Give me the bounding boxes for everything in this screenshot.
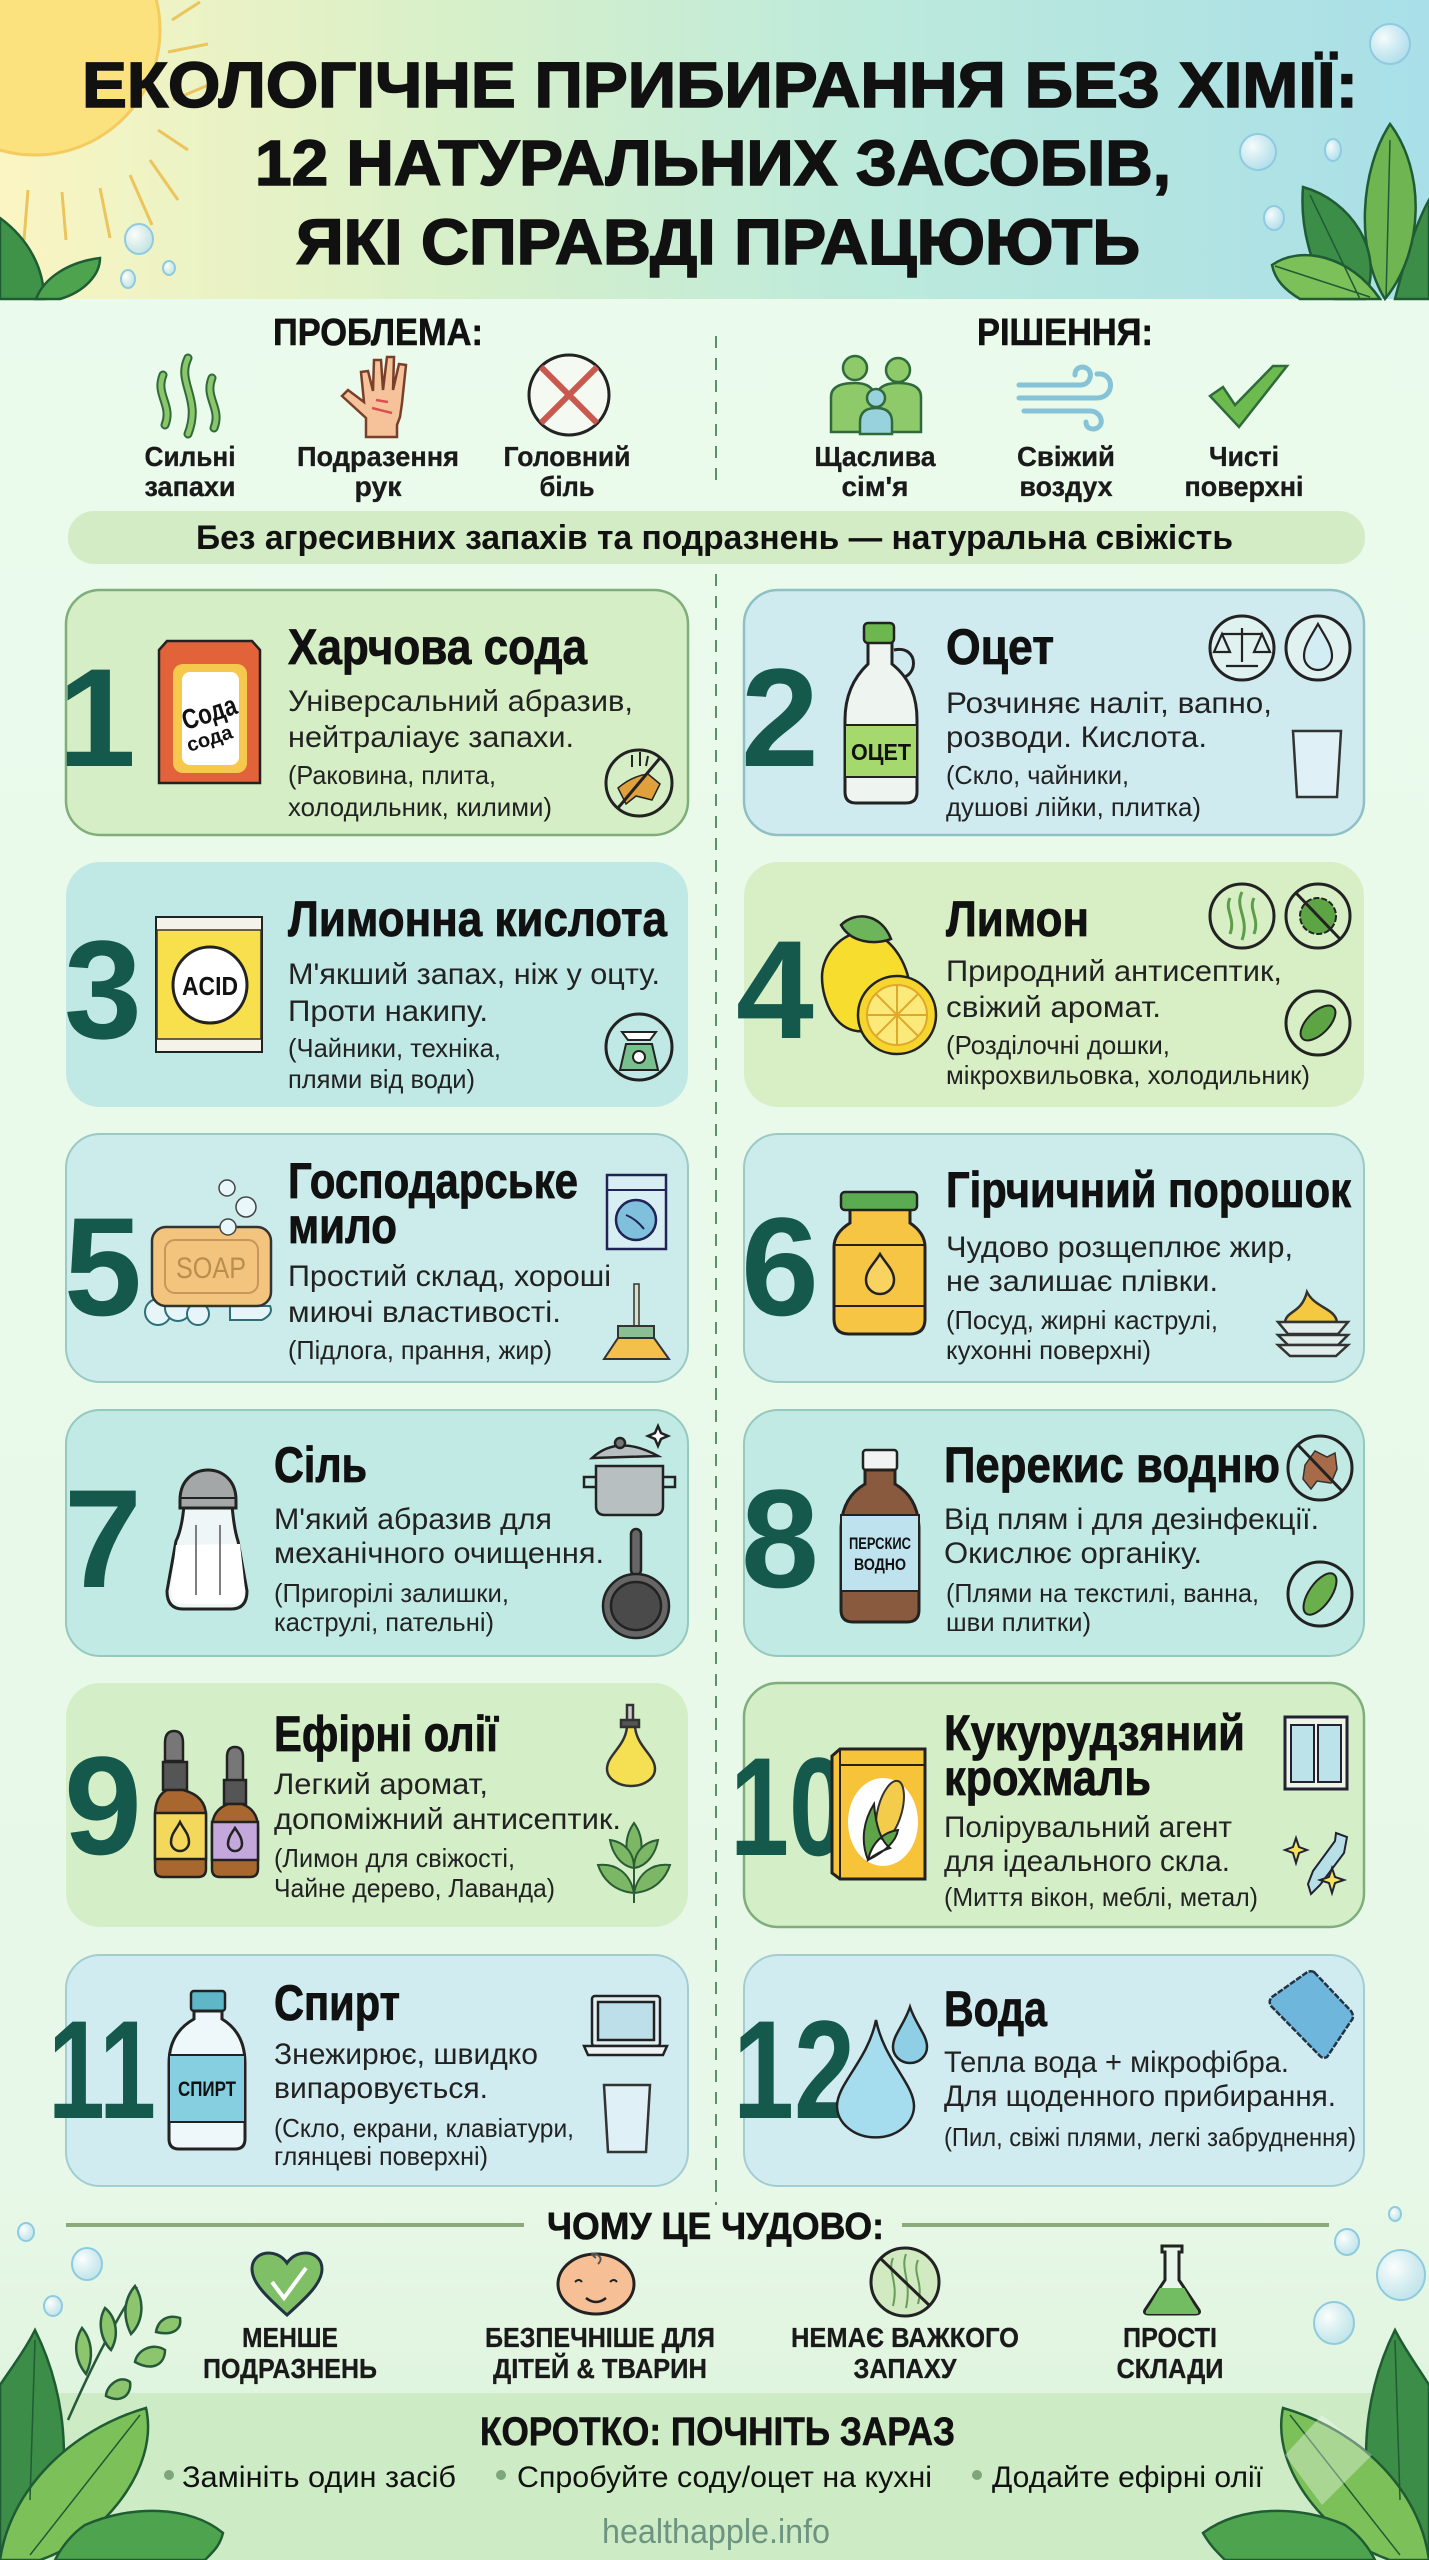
bullet list	[164, 2461, 1264, 2494]
card text: розводи. Кислота.	[946, 721, 1207, 754]
bullet list: Замініть один засіб	[182, 2461, 456, 2494]
header banner	[0, 0, 1429, 299]
card text: (Лимон для свіжості,	[274, 1843, 515, 1873]
card text: Природний антисептик,	[946, 955, 1282, 988]
icon: laptop	[584, 1996, 667, 2055]
card text: Гірчичний порошок	[946, 1162, 1352, 1218]
number 5: 5	[64, 1188, 142, 1345]
website: healthapple.info	[602, 2513, 830, 2551]
icon: window	[1285, 1717, 1347, 1789]
card text: Господарське	[288, 1153, 578, 1209]
icon: leaves bottom right	[1203, 2330, 1429, 2560]
labels: benefits: НЕМАЄ ВАЖКОГО	[791, 2322, 1019, 2353]
title: 12 НАТУРАЛЬНИХ ЗАСОБІВ,	[255, 127, 1171, 199]
icon: greasy plates	[1278, 1292, 1348, 1356]
icon: vinegar bottle: ОЦЕТ	[851, 739, 911, 765]
card text: (Миття вікон, меблі, метал)	[944, 1882, 1258, 1912]
number 8: 8	[741, 1460, 819, 1617]
card text: (Раковина, плита,	[288, 760, 496, 790]
labels: solutions: Щаслива	[814, 441, 936, 472]
heading rule right	[902, 2223, 1329, 2227]
card text: Чудово розщеплює жир,	[946, 1231, 1293, 1264]
panel: card 8	[741, 1410, 1364, 1656]
icon: heart check	[252, 2253, 322, 2315]
card text: Універсальний абразив,	[288, 685, 633, 718]
labels: benefits: ПРОСТІ	[1123, 2322, 1217, 2353]
card text: Проти накипу.	[288, 995, 488, 1028]
number 7: 7	[64, 1460, 142, 1617]
labels: benefits: ПОДРАЗНЕНЬ	[203, 2353, 377, 2384]
bubbles top	[121, 24, 1410, 288]
card text: допоміжний антисептик.	[274, 1803, 621, 1836]
number 2: 2	[741, 639, 819, 796]
card text	[288, 1153, 611, 1365]
card text: глянцеві поверхні)	[274, 2141, 488, 2171]
card text: крохмаль	[944, 1750, 1151, 1806]
icon: fresh smell	[1210, 884, 1274, 948]
panel: problem	[144, 312, 630, 502]
number 9: 9	[64, 1727, 142, 1884]
icon: drinking glass	[604, 2085, 650, 2152]
card text: Чайне дерево, Лаванда)	[274, 1873, 555, 1903]
icon: fresh air	[1019, 367, 1110, 429]
card text: Спирт	[274, 1975, 400, 2031]
section: why it's great	[66, 2206, 1329, 2384]
panel: card 4	[736, 862, 1364, 1107]
card text	[274, 1437, 604, 1637]
card text: Від плям і для дезінфекції.	[944, 1503, 1319, 1536]
card text: Знежирює, швидко	[274, 2038, 538, 2071]
card text: Для щоденного прибирання.	[944, 2080, 1336, 2113]
icon: drop	[1286, 616, 1350, 680]
icon: pot	[584, 1426, 675, 1515]
icon: strong smells	[161, 358, 216, 434]
icon: soda box: сода	[184, 721, 236, 757]
card text: Харчова сода	[288, 619, 588, 675]
labels: problems: Подразення	[297, 441, 459, 472]
labels: problems: Сильні	[144, 441, 236, 472]
labels: problems: біль	[540, 471, 594, 502]
labels: solutions: воздух	[1020, 471, 1113, 502]
card text	[274, 1975, 574, 2171]
heading rule left	[66, 2223, 524, 2227]
icon: bacteria crossed	[1288, 1562, 1352, 1626]
card text: холодильник, килими)	[288, 792, 552, 822]
sparkle watermark	[1285, 2415, 1372, 2505]
icon: check mark	[1210, 366, 1287, 427]
icon: glass	[1293, 731, 1341, 797]
icon: kitchen scale	[606, 1014, 672, 1080]
card text: Перекис водню	[944, 1437, 1280, 1493]
card text: Лимон	[946, 891, 1089, 947]
panel: card 9	[64, 1683, 688, 1927]
icon: right header leaves	[1272, 124, 1429, 299]
number 10: 10	[730, 1728, 848, 1885]
icon: tea tree leaves	[598, 1823, 670, 1903]
icon: washing machine	[607, 1175, 666, 1249]
icon: headache crossed	[529, 355, 609, 435]
card text: (Пил, свіжі плями, легкі забруднення)	[944, 2122, 1356, 2152]
icon: salt shaker	[167, 1470, 247, 1609]
card text: Кукурудзяний	[944, 1705, 1245, 1761]
icon: soda box	[159, 641, 260, 783]
central dashed divider	[715, 574, 717, 2205]
icon: happy family	[831, 356, 921, 434]
icon: peroxide bottle: ПЕРСКИС	[849, 1534, 911, 1553]
icon: bacteria	[1286, 991, 1350, 1055]
bullet list: Додайте ефірні олії	[992, 2461, 1264, 2494]
card text: каструлі, пательні)	[274, 1607, 494, 1637]
bubbles bottom	[18, 2207, 1425, 2344]
panel: card 10	[730, 1683, 1364, 1927]
icon: left header leaves	[0, 218, 100, 299]
labels: benefits: МЕНШЕ	[242, 2322, 338, 2353]
panel: start now	[0, 2393, 1429, 2560]
heading: solution: РІШЕННЯ:	[977, 312, 1153, 354]
card text	[274, 1706, 621, 1903]
number 11: 11	[48, 1991, 156, 2148]
card text: шви плитки)	[946, 1607, 1091, 1637]
card text: (Скло, чайники,	[946, 760, 1129, 790]
card text: (Підлога, прання, жир)	[288, 1335, 552, 1365]
icon: citric acid packet	[156, 917, 262, 1052]
banner: slogan: Без агресивних запахів та подразнень — натуральна свіжість	[196, 519, 1233, 557]
panel: card 12	[733, 1955, 1364, 2186]
card text: для ідеального скла.	[944, 1845, 1230, 1878]
panel: card 7	[64, 1410, 688, 1656]
labels: benefits: ЗАПАХУ	[854, 2353, 957, 2384]
icon: no germs	[1286, 884, 1350, 948]
icon: no heavy smell	[871, 2248, 939, 2316]
card text	[946, 1162, 1352, 1365]
labels: solutions: сім'я	[842, 471, 908, 502]
title	[82, 49, 1358, 278]
heading: why great: ЧОМУ ЦЕ ЧУДОВО:	[547, 2206, 884, 2248]
card text: Вода	[944, 1981, 1048, 2037]
labels: problems: рук	[354, 471, 402, 502]
icon: baby face	[558, 2254, 634, 2314]
icon: soda box: Сода	[178, 689, 241, 736]
card text: (Посуд, жирні каструлі,	[946, 1305, 1218, 1335]
card text: випаровується.	[274, 2072, 488, 2105]
labels: benefits	[203, 2322, 1224, 2384]
icon: sun	[0, 0, 211, 240]
card text: (Чайники, техніка,	[288, 1033, 501, 1063]
icon: no smell stain	[606, 750, 672, 816]
card text: механічного очищення.	[274, 1537, 604, 1570]
labels: solutions: поверхні	[1184, 471, 1304, 502]
card text	[946, 891, 1310, 1090]
labels: problems: запахи	[144, 471, 236, 502]
labels: solutions: Чисті	[1209, 441, 1279, 472]
labels: problems	[144, 441, 630, 502]
card text: кухонні поверхні)	[946, 1335, 1151, 1365]
icon: water drops	[837, 2007, 927, 2137]
card text: не залишає плівки.	[946, 1265, 1218, 1298]
card text: (Плями на текстилі, ванна,	[946, 1578, 1259, 1608]
card text	[288, 891, 668, 1094]
heading: start now: КОРОТКО: ПОЧНІТЬ ЗАРАЗ	[480, 2410, 955, 2454]
divider top	[715, 336, 717, 488]
icon: soap bar	[145, 1180, 271, 1325]
card text: Оцет	[946, 619, 1054, 675]
card text: мило	[288, 1198, 397, 1254]
icon: oil drop	[607, 1705, 655, 1786]
number 3: 3	[64, 911, 142, 1068]
card text: Ефірні олії	[274, 1706, 499, 1762]
icon: irritated hand	[342, 357, 406, 437]
card text: М'якший запах, ніж у оцту.	[288, 958, 660, 991]
icon: broom	[604, 1284, 669, 1359]
card text: (Пригорілі залишки,	[274, 1578, 509, 1608]
icon: vinegar bottle	[845, 623, 917, 803]
number 1: 1	[58, 639, 136, 796]
card text: Лимонна кислота	[288, 891, 668, 947]
number 4: 4	[736, 911, 814, 1068]
icon: no stain	[1288, 1436, 1352, 1500]
panel: card 3	[64, 862, 688, 1107]
card text	[946, 619, 1272, 822]
card text: плями від води)	[288, 1064, 475, 1094]
number 12: 12	[733, 1991, 855, 2148]
labels: benefits: СКЛАДИ	[1116, 2353, 1224, 2384]
panel: card 5	[64, 1134, 688, 1382]
bullet list: Спробуйте соду/оцет на кухні	[517, 2461, 932, 2494]
card text	[288, 619, 633, 822]
card text	[944, 1981, 1356, 2152]
icon: peroxide bottle: ВОДНО	[854, 1555, 906, 1574]
card text	[944, 1437, 1319, 1637]
labels: benefits: БЕЗПЕЧНІШЕ ДЛЯ	[485, 2322, 715, 2353]
card text: (Скло, екрани, клавіатури,	[274, 2113, 574, 2143]
card text: Окислює органіку.	[944, 1537, 1202, 1570]
panel: card 1	[58, 590, 688, 835]
icon: peroxide bottle	[841, 1450, 919, 1622]
card text: Простий склад, хороші	[288, 1260, 611, 1293]
card text: Сіль	[274, 1437, 367, 1493]
icon: sprig bottom left	[68, 2286, 180, 2420]
card text: миючі властивості.	[288, 1296, 561, 1329]
labels: solutions	[814, 441, 1304, 502]
title: ЯКІ СПРАВДІ ПРАЦЮЮТЬ	[296, 206, 1140, 278]
icon: lemon	[822, 916, 936, 1054]
icon: frying pan	[603, 1529, 669, 1638]
icon: microfiber cloth	[1270, 1971, 1353, 2058]
heading: problem: ПРОБЛЕМА:	[273, 312, 483, 354]
number 6: 6	[741, 1188, 819, 1345]
icon: flask	[1144, 2246, 1200, 2314]
icon: citric acid packet: ACID	[182, 971, 238, 1001]
panel: card 6	[741, 1134, 1364, 1382]
card text: душові лійки, плитка)	[946, 792, 1201, 822]
card text: Тепла вода + мікрофібра.	[944, 2046, 1289, 2079]
icon: alcohol bottle: СПИРТ	[178, 2078, 236, 2101]
icon: mustard jar	[834, 1192, 925, 1334]
labels: benefits: ДІТЕЙ & ТВАРИН	[493, 2352, 707, 2384]
card text: нейтраліаує запахи.	[288, 721, 574, 754]
panel: card 2	[741, 590, 1364, 835]
card text: Розчиняє наліт, вапно,	[946, 687, 1272, 720]
card text: Легкий аромат,	[274, 1768, 488, 1801]
labels: problems: Головний	[504, 441, 630, 472]
card text: М'який абразив для	[274, 1503, 552, 1536]
banner: slogan	[68, 511, 1365, 564]
card text	[944, 1705, 1258, 1912]
labels: solutions: Свіжий	[1017, 441, 1115, 472]
card text: (Розділочні дошки,	[946, 1030, 1170, 1060]
icon: alcohol bottle	[169, 1991, 245, 2149]
title: ЕКОЛОГІЧНЕ ПРИБИРАННЯ БЕЗ ХІМІЇ:	[82, 49, 1358, 121]
card text: свіжий аромат.	[946, 991, 1161, 1024]
card text: Полірувальний агент	[944, 1811, 1232, 1844]
icon: soap bar: SOAP	[176, 1252, 246, 1285]
icon: essential oil bottles	[155, 1731, 258, 1877]
icon: corn starch box	[832, 1749, 925, 1879]
icon: leaves bottom left	[0, 2330, 223, 2560]
card text: мікрохвильовка, холодильник)	[946, 1060, 1310, 1090]
panel: solution	[814, 312, 1304, 502]
panel: card 11	[48, 1955, 688, 2186]
icon: scales	[1210, 616, 1274, 680]
icon: sparkling cleaning tool	[1285, 1833, 1347, 1894]
